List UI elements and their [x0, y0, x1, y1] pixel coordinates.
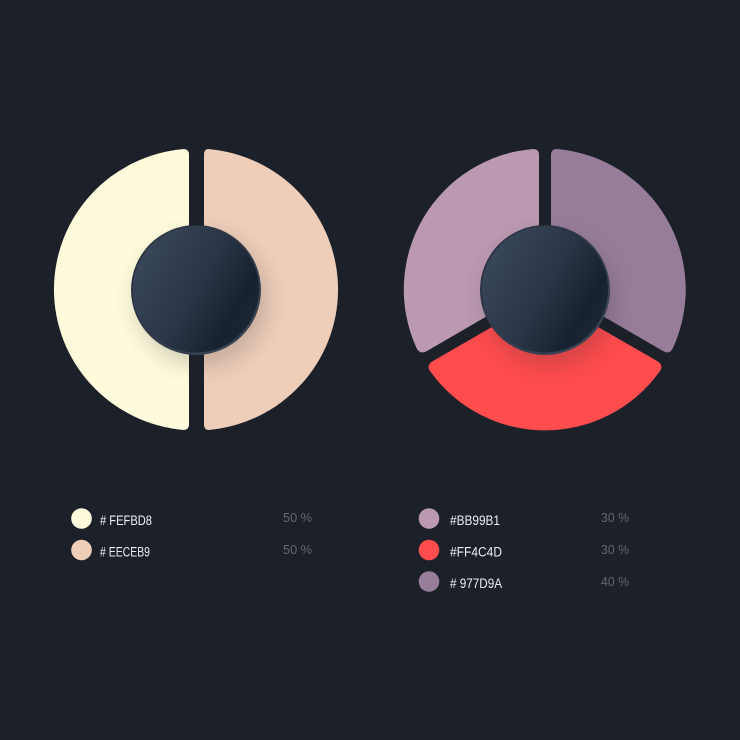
legend row: FF4C4D: #FF4C4D — [450, 544, 502, 560]
legend row: 977D9A — [419, 571, 629, 592]
legend row: FF4C4D: 30 % — [601, 542, 629, 557]
legend: left donut — [71, 508, 312, 560]
hub: right — [480, 225, 610, 355]
segment: EECEB9 50% — [204, 149, 338, 430]
legend row: FEFBD8 — [71, 508, 312, 529]
chart: three-colour donut — [404, 149, 686, 430]
legend row: 977D9A: # 977D9A — [450, 576, 502, 591]
legend row: 977D9A: 40 % — [601, 574, 629, 589]
legend: right donut — [419, 508, 629, 592]
legend row: EECEB9: 50 % — [283, 542, 312, 557]
legend row: BB99B1: 30 % — [601, 510, 629, 525]
segment: BB99B1 30% — [404, 149, 539, 352]
shadow: right hub — [484, 234, 616, 366]
hub: left — [131, 225, 261, 355]
legend row: EECEB9 — [71, 540, 312, 560]
segment: FF4C4D 30% — [429, 296, 661, 430]
segment: 977D9A 40% — [551, 149, 686, 352]
legend row: FEFBD8: 50 % — [283, 510, 312, 525]
legend row: FF4C4D — [419, 540, 629, 560]
legend row: BB99B1 — [419, 508, 629, 529]
legend row: FEFBD8: # FEFBD8 — [100, 513, 152, 528]
legend row: EECEB9: # EECEB9 — [100, 544, 150, 560]
chart: two-colour donut — [54, 149, 338, 430]
legend row: BB99B1: #BB99B1 — [450, 513, 500, 528]
shadow: left hub — [135, 234, 267, 366]
segment: FEFBD8 50% — [54, 149, 189, 430]
